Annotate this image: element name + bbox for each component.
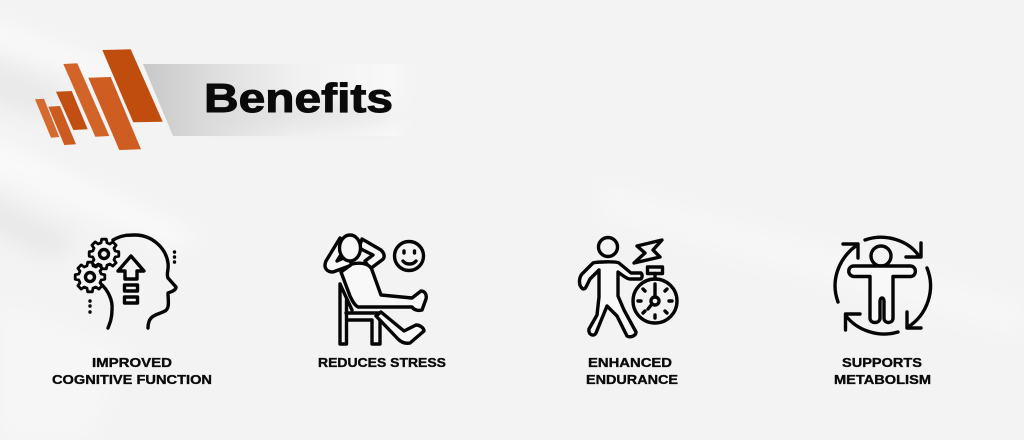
body [579, 262, 642, 337]
icon: head with gears [75, 235, 176, 328]
smiley [394, 242, 424, 270]
label: supports metabolism [834, 355, 931, 387]
body and leg [341, 263, 426, 310]
title: Benefits [204, 75, 393, 121]
gear upper [89, 239, 119, 269]
head [340, 235, 360, 261]
label: improved cognitive function [52, 355, 212, 387]
label: enhanced endurance: ENDURANCE [586, 372, 678, 387]
label: improved cognitive function: IMPROVED [92, 355, 172, 370]
arrow: left [835, 244, 858, 302]
stopwatch [633, 267, 677, 323]
lower leg [376, 312, 424, 343]
up arrow [118, 256, 144, 279]
arrow: right [907, 268, 931, 328]
icon: body with circular arrows [835, 237, 931, 334]
title shadow [200, 102, 400, 126]
arrow: top [865, 237, 921, 257]
label: enhanced endurance [586, 355, 678, 387]
banner band [143, 64, 420, 136]
head [598, 238, 618, 256]
body [849, 266, 915, 322]
title banner [143, 64, 420, 136]
gear lower [75, 262, 105, 292]
dots [90, 252, 174, 312]
chair [340, 284, 380, 344]
label: improved cognitive function: COGNITIVE FUNCTION [52, 372, 212, 387]
label: supports metabolism: METABOLISM [834, 372, 931, 387]
arms [325, 238, 352, 272]
head [871, 246, 891, 266]
arrow: bottom [846, 314, 898, 334]
label: enhanced endurance: ENHANCED [588, 355, 672, 370]
logo: orange bars [35, 49, 163, 150]
label: supports metabolism: SUPPORTS [842, 355, 922, 370]
icon: walking person with stopwatch [579, 238, 677, 337]
icon: relaxing person with smiley [325, 235, 426, 344]
label: reduces stress: REDUCES STRESS [318, 355, 446, 370]
lightning bolt [634, 240, 662, 263]
